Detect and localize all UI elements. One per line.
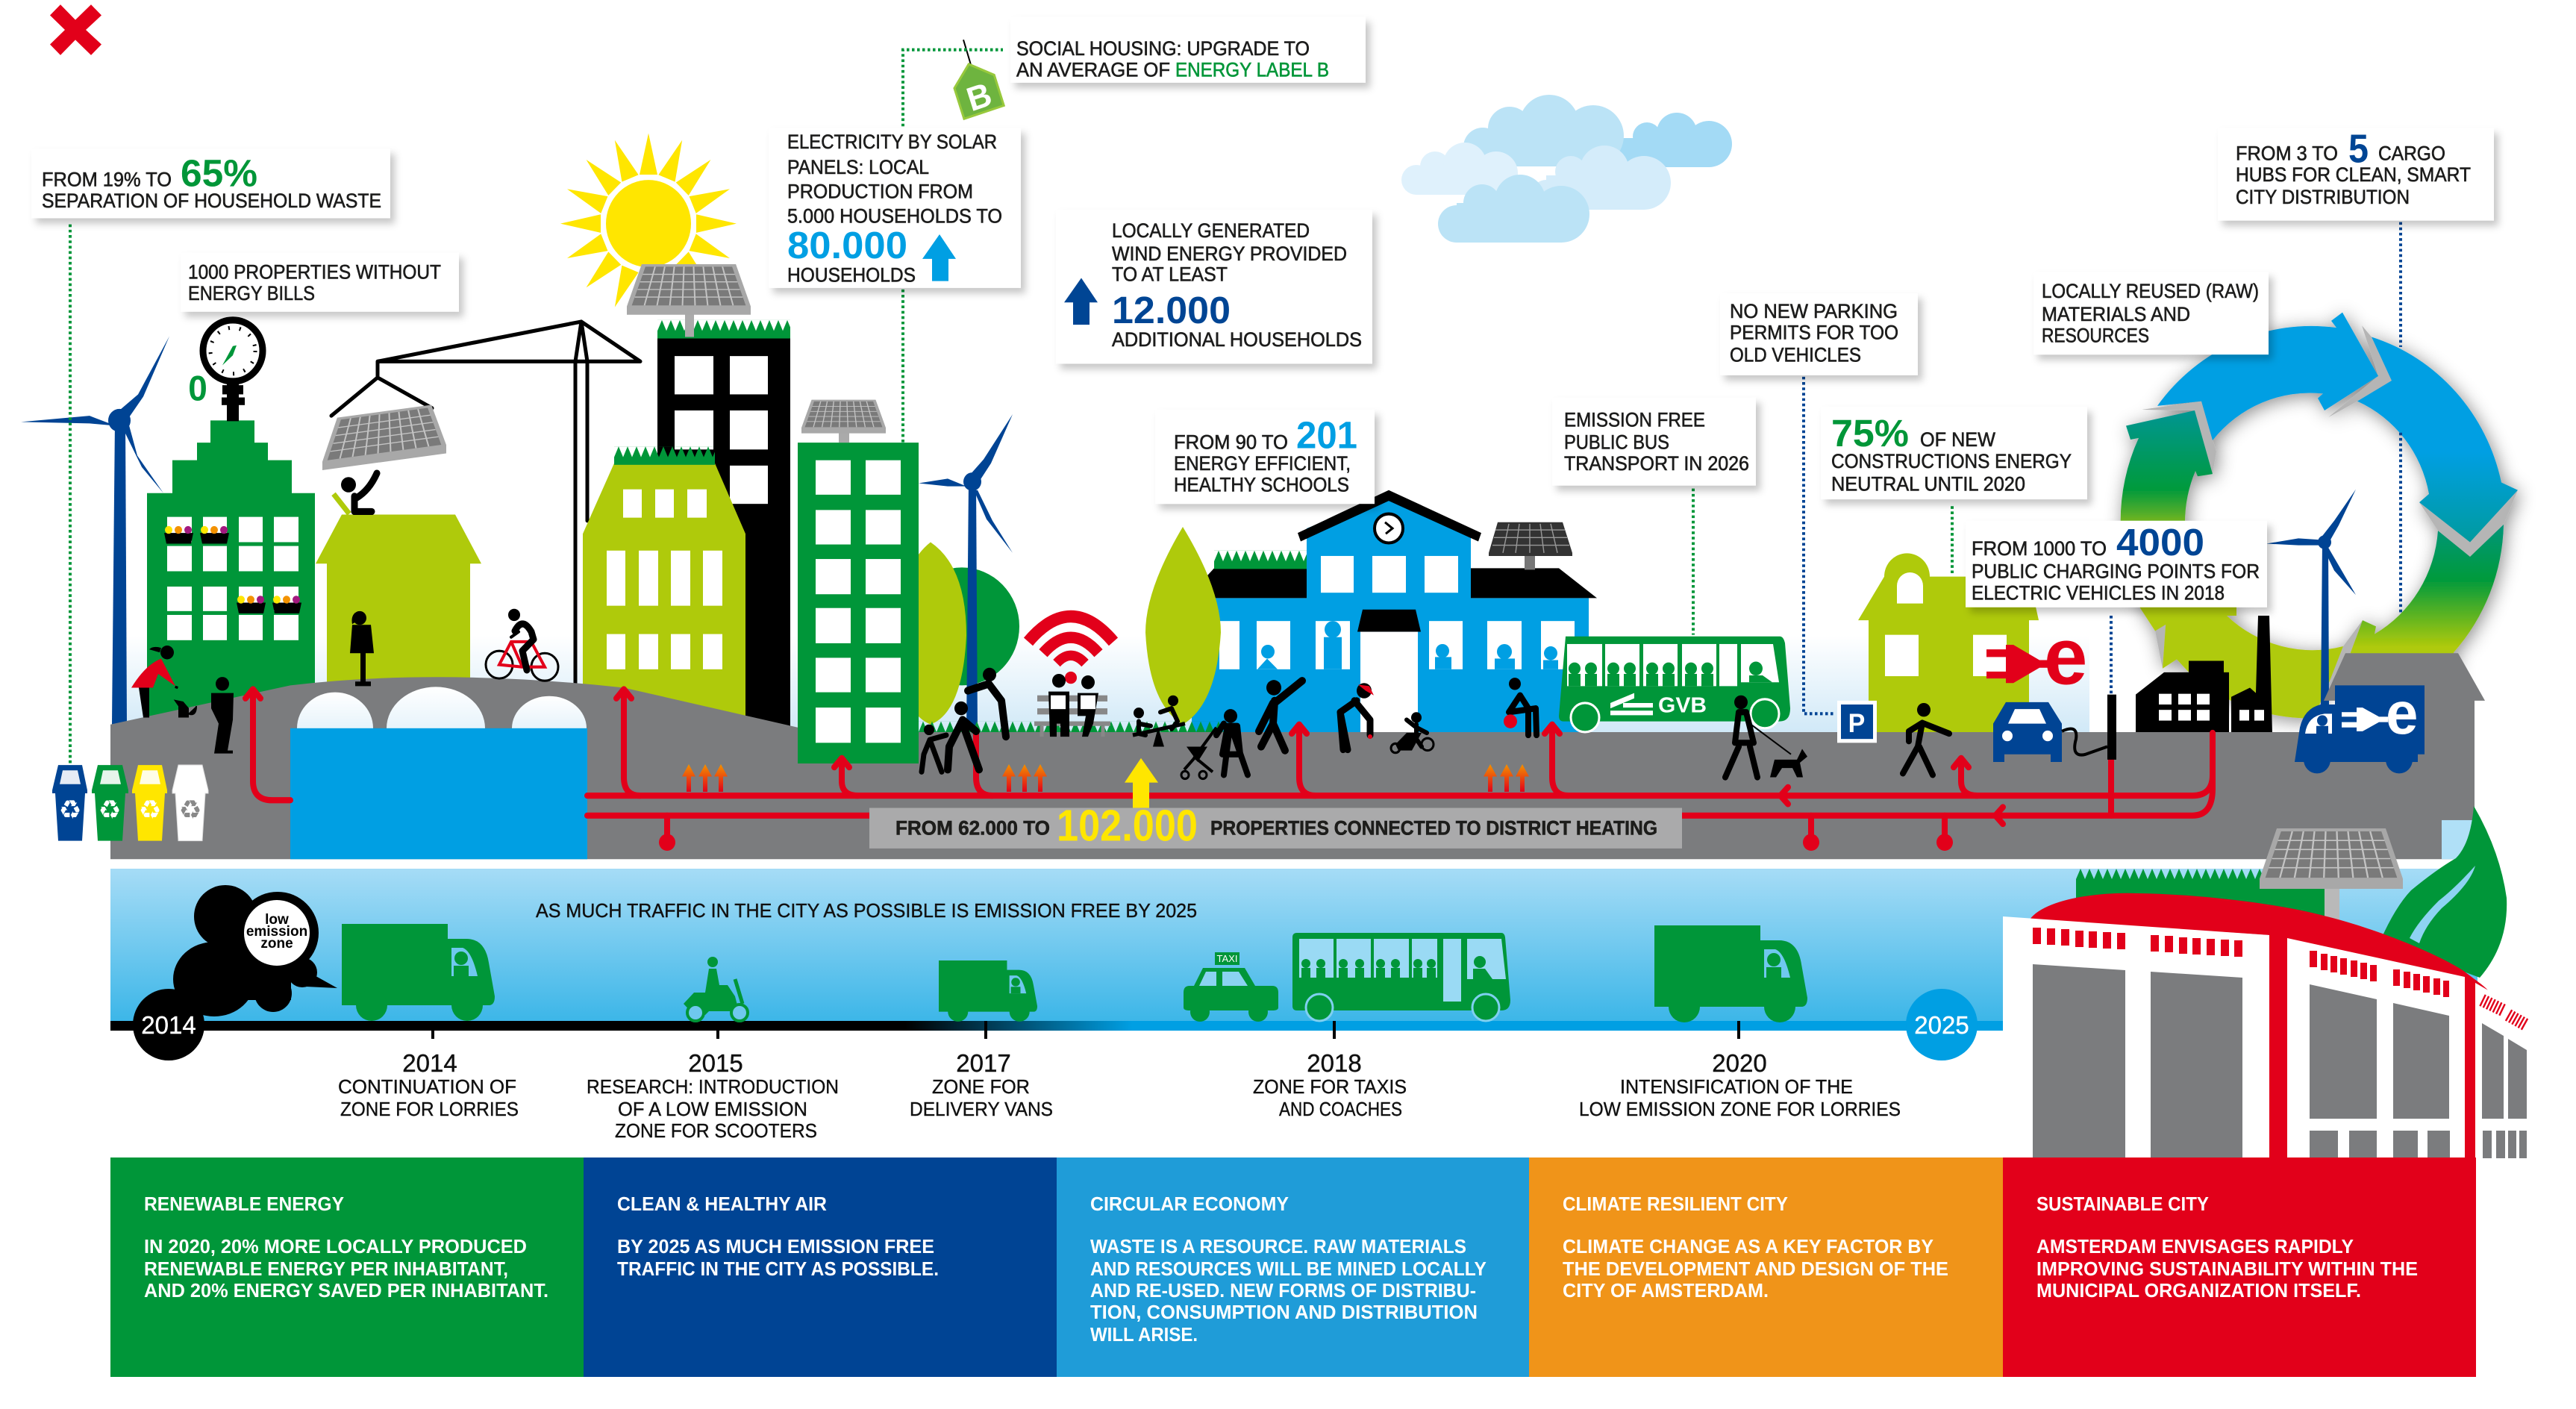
callout: public bus bbox=[1552, 398, 1756, 486]
taxi 2018 bbox=[1184, 952, 1278, 1022]
municipal building green roof bbox=[2076, 869, 2326, 899]
recycling bins: ♻ bbox=[99, 796, 121, 825]
GVB bus: GVB bbox=[1658, 693, 1707, 717]
panel: climate resilient city bbox=[1529, 1157, 2003, 1377]
callout: public bus: TRANSPORT IN 2026 bbox=[1564, 452, 1749, 475]
arrow: top blue bbox=[2157, 313, 2378, 440]
smoke cloud with low emission zone: emission bbox=[246, 924, 307, 940]
municipal building bbox=[2003, 893, 2527, 1158]
child on tricycle bbox=[1391, 712, 1434, 753]
timeline heading: AS MUCH TRAFFIC IN THE CITY AS POSSIBLE IS EMISSION FREE BY 2025 bbox=[536, 899, 1197, 922]
woman walking dog bbox=[1725, 696, 1807, 777]
callout: new constructions bbox=[1821, 407, 2087, 499]
arrow: left green bbox=[2121, 410, 2213, 631]
callout: charging points bbox=[1966, 520, 2267, 607]
heat arrows bbox=[682, 764, 1529, 792]
timeline bar bbox=[110, 1021, 2003, 1031]
scooter 2015 bbox=[684, 957, 748, 1021]
timeline entry 2020: LOW EMISSION ZONE FOR LORRIES bbox=[1579, 1098, 1901, 1120]
timeline entry 2020: INTENSIFICATION OF THE bbox=[1620, 1075, 1853, 1098]
callout: charging points: 4000 bbox=[2116, 520, 2204, 563]
GVB bus bbox=[1559, 637, 1790, 732]
clouds bbox=[1401, 95, 1732, 243]
black tower bbox=[657, 320, 790, 735]
light blue notch bbox=[2442, 820, 2476, 859]
callout: social housing: SOCIAL HOUSING: UPGRADE TO bbox=[1016, 37, 1310, 60]
leaf vein highlight bbox=[2410, 866, 2475, 943]
timeline entry 2018: ZONE FOR TAXIS bbox=[1253, 1075, 1407, 1098]
callout: cargo hubs: FROM 3 TO bbox=[2236, 142, 2338, 165]
recycling bins: ♻ bbox=[59, 796, 81, 825]
timeline entry 2015: RESEARCH: INTRODUCTION bbox=[587, 1075, 839, 1098]
electric van: e bbox=[2386, 679, 2418, 746]
label B tag: B bbox=[963, 76, 996, 119]
panel: renewable energy: AND 20% ENERGY SAVED PER INHABITANT. bbox=[144, 1279, 548, 1302]
sun bbox=[560, 134, 737, 314]
pedestrian bbox=[1903, 703, 1949, 775]
callout: energy bills bbox=[181, 253, 459, 312]
red electric plug e bbox=[1986, 611, 2087, 702]
callout: social housing bbox=[1010, 17, 1366, 83]
label B tag bbox=[949, 40, 1004, 122]
panel: renewable energy: RENEWABLE ENERGY bbox=[144, 1193, 344, 1215]
wifi symbol bbox=[1028, 616, 1113, 684]
canal water bbox=[290, 728, 587, 859]
callout: solar panels bbox=[769, 128, 1021, 288]
callout: healthy schools: FROM 90 TO bbox=[1174, 431, 1288, 453]
smoke cloud with low emission zone: low bbox=[265, 912, 289, 928]
worker on roof bbox=[334, 473, 377, 514]
solar panel on municipal building bbox=[2260, 828, 2403, 920]
wind turbine left bbox=[21, 336, 169, 725]
callout: wind energy bbox=[1056, 210, 1372, 363]
callout: solar panels: ELECTRICITY BY SOLAR bbox=[787, 131, 997, 153]
callout: cargo hubs: 5 bbox=[2348, 127, 2369, 172]
parking sign: P bbox=[1848, 710, 1865, 738]
panel: sustainable city: MUNICIPAL ORGANIZATION ITSELF. bbox=[2036, 1279, 2361, 1302]
timeline entry 2018: 2018 bbox=[1307, 1049, 1362, 1077]
timeline entry 2018 bbox=[1253, 1049, 1407, 1120]
callout: cargo hubs: HUBS FOR CLEAN, SMART bbox=[2236, 163, 2471, 186]
school solar panel bbox=[1489, 522, 1572, 569]
leaf bbox=[2380, 806, 2507, 978]
panel: climate resilient city: CITY OF AMSTERDAM. bbox=[1563, 1279, 1769, 1302]
panel: clean and healthy air: CLEAN & HEALTHY AIR bbox=[617, 1193, 827, 1215]
smoke cloud with low emission zone: zone bbox=[260, 936, 293, 952]
timeline entry 2014: ZONE FOR LORRIES bbox=[340, 1098, 519, 1120]
callout: reused materials: MATERIALS AND bbox=[2042, 303, 2190, 325]
crane bbox=[331, 322, 640, 685]
timeline entry 2014 bbox=[338, 1049, 519, 1120]
timeline white lower band bbox=[110, 1031, 2003, 1157]
lime house bbox=[316, 515, 481, 689]
road and bridge bbox=[110, 653, 2485, 859]
callout: healthy schools bbox=[1155, 410, 1375, 504]
panel: clean and healthy air: BY 2025 AS MUCH EMISSION FREE bbox=[617, 1235, 934, 1258]
lorry 2020 bbox=[1654, 925, 1807, 1022]
callout: energy bills: 1000 PROPERTIES WITHOUT bbox=[188, 260, 441, 284]
callout: charging points: ELECTRIC VEHICLES IN 2018 bbox=[1972, 581, 2225, 604]
panel: climate resilient city: CLIMATE RESILIENT CITY bbox=[1563, 1193, 1788, 1215]
circular economy ring bbox=[2121, 313, 2518, 719]
bridge arches bbox=[297, 687, 587, 769]
callout: reused materials: LOCALLY REUSED (RAW) bbox=[2042, 280, 2259, 302]
lime tree near school bbox=[1145, 527, 1221, 725]
timeline sky band bbox=[110, 869, 2477, 1022]
panel: sustainable city bbox=[2003, 1157, 2476, 1377]
callout: public bus: PUBLIC BUS bbox=[1564, 431, 1669, 453]
timeline entry 2017: DELIVERY VANS bbox=[910, 1098, 1053, 1120]
man with red ball bbox=[1504, 678, 1536, 735]
2025 marker: 2025 bbox=[1914, 1011, 1969, 1039]
recycling bins: ♻ bbox=[179, 796, 201, 825]
callout: wind energy: LOCALLY GENERATED bbox=[1112, 219, 1310, 242]
timeline entry 2020: 2020 bbox=[1712, 1049, 1767, 1077]
arrow: bottom right bbox=[2343, 525, 2504, 689]
callout: new constructions: NEUTRAL UNTIL 2020 bbox=[1831, 472, 2025, 496]
bus 2018 bbox=[1292, 933, 1510, 1021]
callout: wind energy: TO AT LEAST bbox=[1112, 263, 1228, 286]
panel: sustainable city: AMSTERDAM ENVISAGES RAPIDLY bbox=[2036, 1235, 2354, 1258]
solar panel on crane bbox=[322, 403, 446, 470]
red close cross bbox=[50, 4, 101, 55]
callout: new constructions: 75% bbox=[1831, 412, 1909, 454]
district heating bar: PROPERTIES CONNECTED TO DISTRICT HEATING bbox=[1210, 816, 1657, 840]
panel: circular economy: TION, CONSUMPTION AND DISTRIBUTION bbox=[1090, 1301, 1478, 1323]
lime tall building bbox=[583, 446, 745, 720]
panel: circular economy: WASTE IS A RESOURCE. RAW MATERIALS bbox=[1090, 1235, 1466, 1258]
2025 marker bbox=[1906, 989, 1978, 1060]
adult and child walking bbox=[922, 702, 979, 772]
trees behind turbine bbox=[895, 542, 1019, 725]
solar panel on black tower bbox=[627, 264, 751, 337]
callout: new constructions: CONSTRUCTIONS ENERGY bbox=[1831, 450, 2072, 472]
timeline ticks bbox=[433, 1021, 1739, 1039]
kids on seesaw bbox=[1133, 696, 1185, 746]
callout: solar panels: PRODUCTION FROM bbox=[787, 180, 973, 203]
smoke cloud with low emission zone bbox=[133, 885, 337, 1060]
callout: wind energy: WIND ENERGY PROVIDED bbox=[1112, 243, 1347, 265]
callout: parking permits bbox=[1720, 293, 1918, 375]
couple on bench bbox=[1034, 674, 1110, 737]
timeline entry 2015: 2015 bbox=[688, 1049, 743, 1077]
wind turbine middle bbox=[919, 414, 1013, 733]
callout: wind energy: ADDITIONAL HOUSEHOLDS bbox=[1112, 328, 1362, 351]
yellow up arrow bbox=[1125, 758, 1158, 808]
callout: healthy schools: 201 bbox=[1296, 413, 1357, 456]
standing man bbox=[211, 677, 234, 754]
timeline entry 2014: CONTINUATION OF bbox=[338, 1075, 516, 1098]
woman with cat bbox=[131, 646, 196, 717]
panel: renewable energy: RENEWABLE ENERGY PER INHABITANT, bbox=[144, 1258, 508, 1280]
man by turbine bbox=[968, 668, 1006, 737]
panel: circular economy: AND RE-USED. NEW FORMS OF DISTRIBU- bbox=[1090, 1279, 1476, 1302]
callout: parking permits: NO NEW PARKING bbox=[1730, 300, 1898, 322]
city scene bbox=[21, 4, 2518, 859]
mother with stroller bbox=[1181, 709, 1248, 779]
arrow: right blue green bbox=[2357, 337, 2518, 542]
panel: clean and healthy air: TRAFFIC IN THE CITY AS POSSIBLE. bbox=[617, 1258, 939, 1280]
timeline entry 2015: ZONE FOR SCOOTERS bbox=[615, 1119, 817, 1142]
timeline entry 2014: 2014 bbox=[402, 1049, 457, 1077]
district heating bar: FROM 62.000 TO bbox=[895, 816, 1050, 840]
dotted connectors bbox=[70, 50, 2401, 763]
callout: reused materials bbox=[2033, 272, 2269, 354]
timeline entry 2017 bbox=[910, 1049, 1053, 1120]
callout: cargo hubs bbox=[2218, 127, 2494, 221]
delivery van 2017 bbox=[939, 960, 1037, 1022]
panel: circular economy bbox=[1057, 1157, 1529, 1377]
timeline entry 2015: OF A LOW EMISSION bbox=[618, 1098, 807, 1120]
grass strip bbox=[919, 722, 1224, 735]
lorry 2014 bbox=[342, 924, 495, 1021]
timeline entry 2017: 2017 bbox=[956, 1049, 1011, 1077]
callout: cargo hubs: CITY DISTRIBUTION bbox=[2236, 186, 2410, 208]
callout: social housing: AN AVERAGE OF bbox=[1016, 58, 1170, 81]
smoke cloud with low emission zone: 2014 bbox=[141, 1011, 196, 1039]
callout: energy bills: ENERGY BILLS bbox=[188, 282, 315, 304]
pressure gauge with zero bill bbox=[188, 320, 263, 421]
panel: circular economy: WILL ARISE. bbox=[1090, 1323, 1198, 1346]
electric van bbox=[2295, 679, 2425, 773]
callout: household waste: 65% bbox=[181, 151, 257, 194]
timeline entry 2020 bbox=[1579, 1049, 1901, 1120]
panel: sustainable city: IMPROVING SUSTAINABILITY WITHIN THE bbox=[2036, 1258, 2418, 1280]
callout: public bus: EMISSION FREE bbox=[1564, 408, 1705, 431]
callout: healthy schools: HEALTHY SCHOOLS bbox=[1174, 473, 1349, 496]
panel: renewable energy bbox=[110, 1157, 584, 1377]
green gabled building bbox=[147, 420, 315, 725]
panel: renewable energy: IN 2020, 20% MORE LOCALLY PRODUCED bbox=[144, 1235, 527, 1258]
panel: sustainable city: SUSTAINABLE CITY bbox=[2036, 1193, 2209, 1215]
callout: new constructions: OF NEW bbox=[1920, 428, 1995, 451]
tall green apartment building bbox=[798, 443, 919, 763]
panel: circular economy: AND RESOURCES WILL BE MINED LOCALLY bbox=[1090, 1258, 1486, 1280]
callout: cargo hubs: CARGO bbox=[2378, 142, 2445, 165]
callout: solar panels: PANELS: LOCAL bbox=[787, 156, 929, 178]
woman on bridge bbox=[350, 611, 374, 686]
ground haze sky bbox=[112, 636, 2089, 735]
callout: solar panels: HOUSEHOLDS bbox=[787, 263, 916, 287]
callout: reused materials: RESOURCES bbox=[2042, 324, 2149, 347]
pointing man bbox=[1259, 680, 1302, 751]
callout: healthy schools: ENERGY EFFICIENT, bbox=[1174, 452, 1351, 475]
parking sign bbox=[1837, 701, 1877, 743]
factory bbox=[2136, 616, 2272, 734]
wind turbine right bbox=[2266, 490, 2356, 704]
callout: household waste: FROM 19% TO bbox=[42, 168, 172, 190]
taxi 2018: TAXI bbox=[1217, 953, 1237, 964]
people silhouettes bbox=[131, 609, 1949, 779]
district heating bar bbox=[869, 802, 1682, 851]
pipe end nodes bbox=[659, 834, 1953, 851]
callout: social housing: ENERGY LABEL B bbox=[1175, 58, 1329, 81]
recycling bins bbox=[52, 765, 208, 841]
cyclist bbox=[486, 609, 558, 681]
electric car at charging post bbox=[1993, 695, 2116, 762]
callout: charging points: PUBLIC CHARGING POINTS FOR bbox=[1972, 560, 2260, 583]
pressure gauge with zero bill: 0 bbox=[188, 369, 207, 408]
callout: household waste: SEPARATION OF HOUSEHOLD WASTE bbox=[42, 190, 381, 212]
callout: wind energy: 12.000 bbox=[1112, 288, 1231, 331]
school bbox=[1187, 490, 1597, 735]
timeline entry 2018: AND COACHES bbox=[1279, 1098, 1402, 1120]
callout: parking permits: OLD VEHICLES bbox=[1730, 343, 1861, 366]
panel: clean and healthy air bbox=[584, 1157, 1057, 1377]
timeline entry 2017: ZONE FOR bbox=[932, 1075, 1030, 1098]
callout: solar panels: 80.000 bbox=[787, 223, 907, 266]
panel: climate resilient city: CLIMATE CHANGE AS A KEY FACTOR BY bbox=[1563, 1235, 1933, 1258]
solar panel on tall green building bbox=[801, 400, 886, 443]
panel: climate resilient city: THE DEVELOPMENT AND DESIGN OF THE bbox=[1563, 1258, 1948, 1280]
callout: charging points: FROM 1000 TO bbox=[1972, 537, 2107, 560]
red electric plug e: e bbox=[2044, 611, 2087, 702]
man with red cap bbox=[1340, 683, 1374, 750]
panel: circular economy: CIRCULAR ECONOMY bbox=[1090, 1193, 1289, 1215]
callout: solar panels: 5.000 HOUSEHOLDS TO bbox=[787, 204, 1002, 228]
timeline entry 2015 bbox=[587, 1049, 839, 1142]
municipal roof base bbox=[2076, 896, 2326, 922]
district heating pipes bbox=[246, 689, 2213, 843]
ring gaps bbox=[2142, 325, 2518, 684]
district heating bar: 102.000 bbox=[1057, 802, 1198, 851]
recycling bins: ♻ bbox=[139, 796, 161, 825]
right lime house bbox=[1858, 553, 2039, 762]
callout: household waste bbox=[31, 149, 390, 218]
callout: parking permits: PERMITS FOR TOO bbox=[1730, 321, 1898, 344]
arrow: bottom lime bbox=[2163, 605, 2343, 719]
